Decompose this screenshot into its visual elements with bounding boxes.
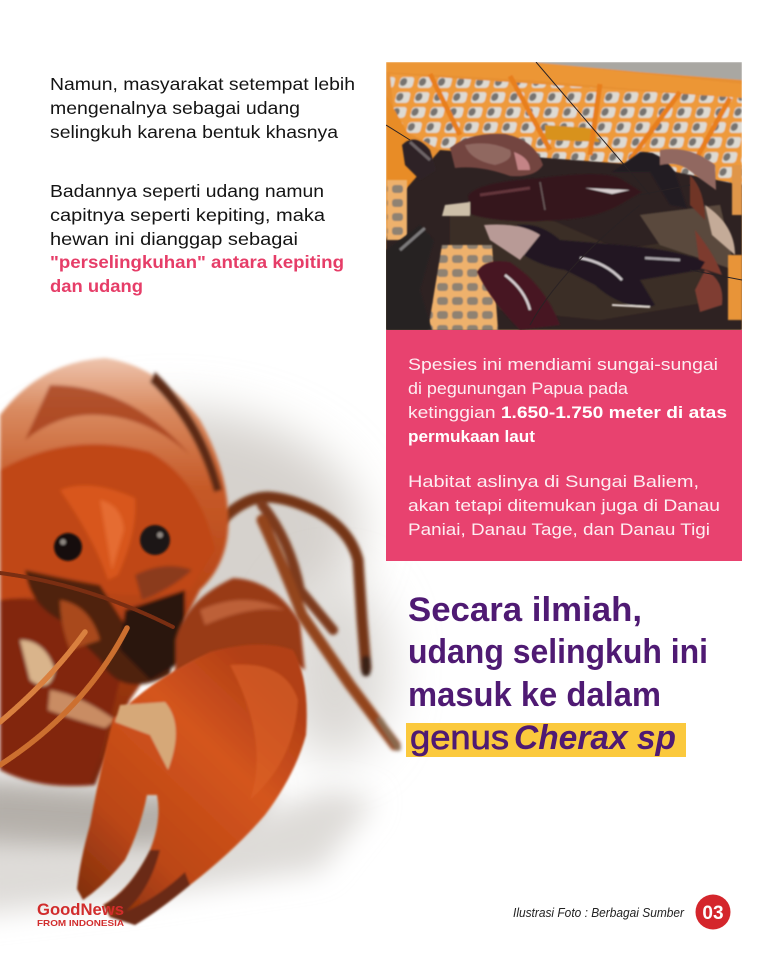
heading: scientific classification: Secara ilmiah, <box>408 591 642 629</box>
lower dark crayfish <box>517 225 705 307</box>
crayfish pile <box>386 150 742 330</box>
panel: pink habitat text: di pegunungan Papua pada <box>408 379 629 398</box>
photo credit: Ilustrasi Foto : Berbagai Sumber <box>513 905 685 920</box>
text: intro paragraphs: capitnya seperti kepiting, maka <box>50 205 325 225</box>
text: intro paragraphs: Namun, masyarakat setempat lebih <box>50 74 355 94</box>
text: intro paragraphs: Badannya seperti udang namun <box>50 181 324 201</box>
abdomen highlight <box>20 640 55 686</box>
claw upper left <box>402 140 436 180</box>
text: intro paragraphs <box>50 74 355 296</box>
carapace and body <box>0 358 228 786</box>
highlight: genus name: genus <box>410 719 509 757</box>
panel: pink habitat text: Spesies ini mendiami sungai-sungai <box>408 355 718 374</box>
text: intro paragraphs: hewan ini dianggap sebagai <box>50 229 298 249</box>
highlight: genus name <box>406 719 686 757</box>
right claw <box>612 152 687 208</box>
panel: pink habitat text: akan tetapi ditemukan juga di Danau <box>408 496 720 515</box>
text: intro paragraphs: selingkuh karena bentuk khasnya <box>50 122 338 142</box>
page number: 03 <box>702 903 724 924</box>
logo: GoodNews <box>37 900 124 928</box>
panel: pink habitat text: ketinggian 1.650-1.750 meter di atas <box>408 403 727 422</box>
highlighted text <box>50 252 344 296</box>
panel: pink habitat text <box>386 330 742 561</box>
crate floor <box>387 165 742 330</box>
highlighted text: "perselingkuhan" antara kepiting <box>50 252 344 272</box>
panel: pink habitat text: permukaan laut <box>408 427 535 446</box>
photo: red crayfish on white plate <box>0 358 398 925</box>
highlighted text: dan udang <box>50 276 143 296</box>
left dark crayfish <box>386 225 434 330</box>
eyes <box>54 525 170 561</box>
pink crayfish upper left <box>450 134 543 176</box>
legs <box>222 497 398 748</box>
logo: GoodNews: FROM INDONESIA <box>37 918 124 928</box>
backdrop shadow <box>0 410 390 915</box>
heading: scientific classification: udang selingkuh ini <box>408 633 708 671</box>
highlight: genus name: Cherax sp <box>514 719 676 757</box>
heading: scientific classification: masuk ke dalam <box>408 676 661 714</box>
crate <box>386 62 742 330</box>
antennae <box>386 62 742 325</box>
crayfish <box>386 134 735 330</box>
face shadow <box>25 570 180 685</box>
antennae <box>0 573 173 765</box>
photo: crayfish in orange crate <box>386 62 742 330</box>
large claw <box>77 644 307 925</box>
upper arm <box>175 578 305 675</box>
rostrum <box>60 486 135 580</box>
panel: pink habitat text: Paniai, Danau Tage, dan Danau Tigi <box>408 520 710 539</box>
logo: GoodNews: GoodNews <box>37 900 124 919</box>
main dark crayfish <box>468 174 642 221</box>
page number <box>696 894 730 930</box>
bottom right pink <box>695 270 722 312</box>
panel: pink habitat text: Habitat aslinya di Sungai Baliem, <box>408 472 699 491</box>
heading: scientific classification <box>406 591 708 757</box>
bottom red crayfish <box>477 261 560 330</box>
text: intro paragraphs: mengenalnya sebagai udang <box>50 98 300 118</box>
